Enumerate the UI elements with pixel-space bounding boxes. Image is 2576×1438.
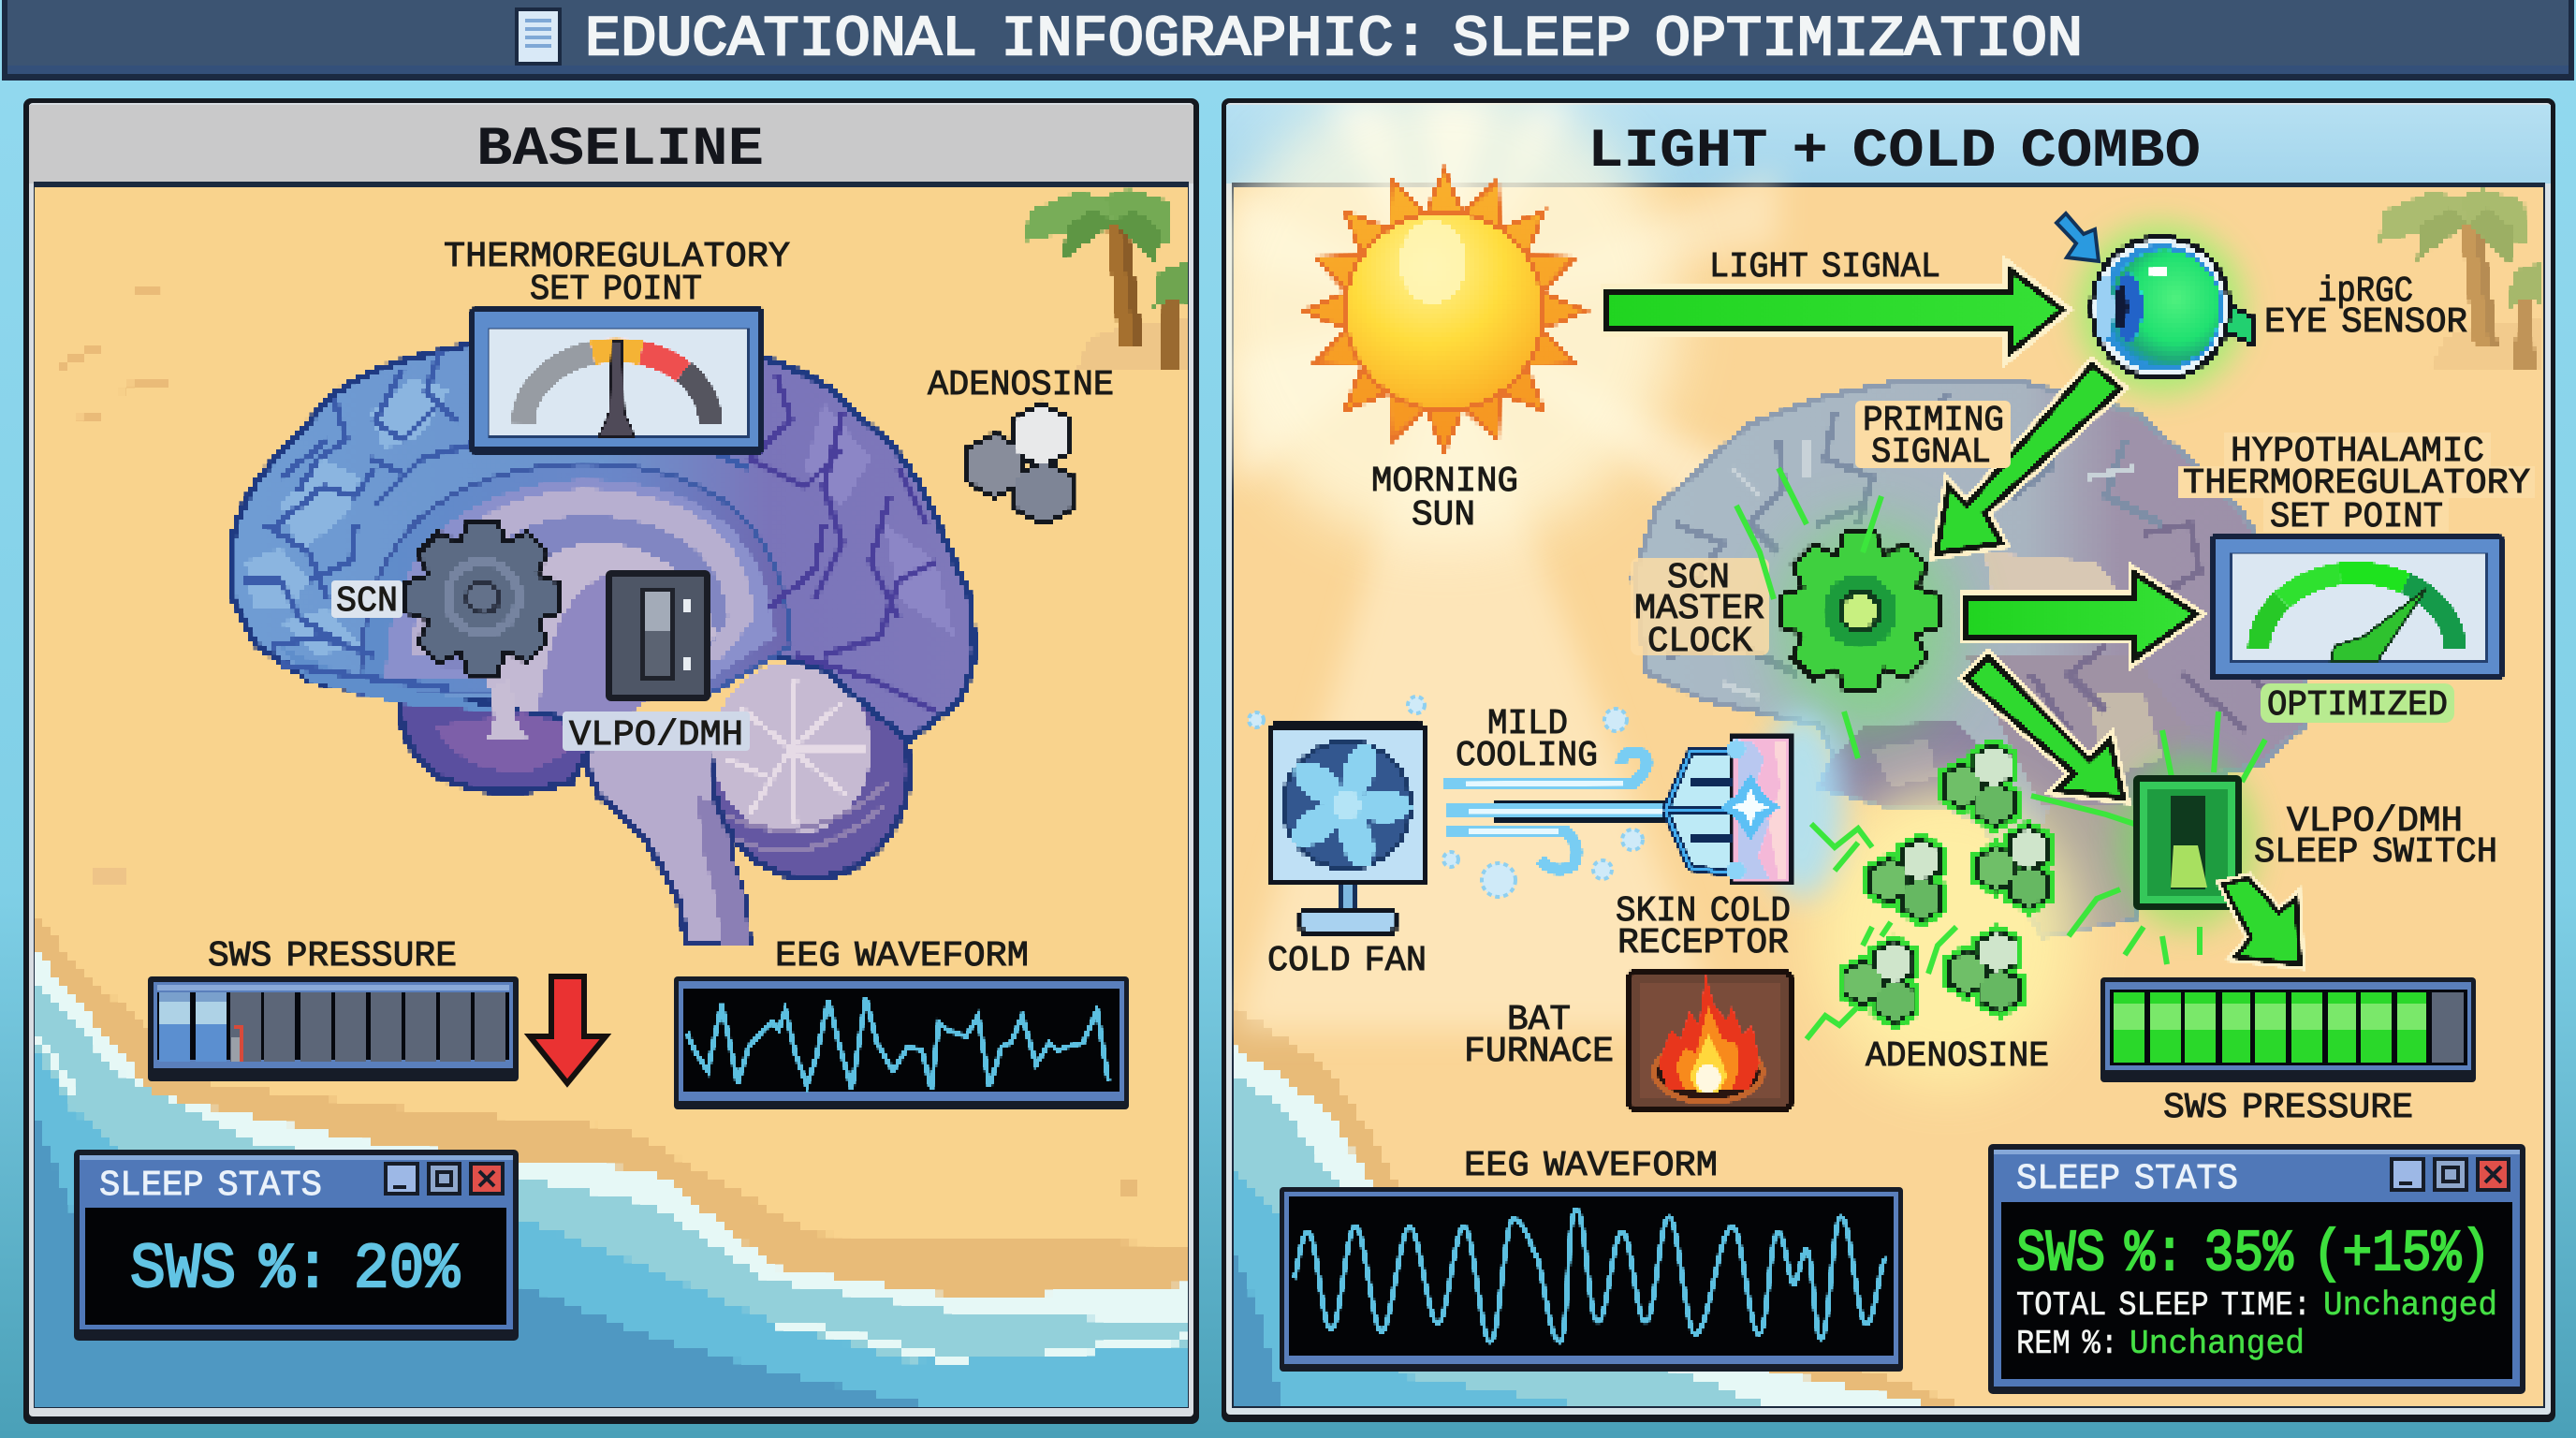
icon: cold fan [1269, 726, 1425, 932]
brain illustration [233, 330, 974, 944]
mild cooling label: COOLING [1456, 736, 1598, 776]
icon: document [517, 9, 560, 64]
arrow: to set point [1967, 574, 2196, 658]
priming signal label: PRIMING [1863, 401, 2004, 441]
optimized gauge [2209, 535, 2504, 681]
thermoregulatory label [444, 237, 790, 310]
window buttons [2392, 1159, 2509, 1190]
panel frame [1222, 98, 2555, 1422]
thermoregulatory gauge [470, 307, 765, 454]
mild cooling label [1456, 704, 1598, 776]
central patches [1984, 552, 2125, 599]
window title: SLEEP STATS [99, 1166, 322, 1206]
morning sun label: SUN [1412, 495, 1475, 536]
VLPO/DMH label: VLPO/DMH [569, 715, 743, 756]
SWS pressure bar [148, 976, 519, 1081]
icon: adenosine molecule [969, 405, 1070, 522]
thermoregulatory label: SET POINT [530, 270, 702, 310]
SCN master clock label: CLOCK [1647, 622, 1752, 662]
morning sun label [1371, 462, 1518, 536]
heading: light + cold combo: LIGHT + COLD COMBO [1588, 122, 2201, 183]
EEG trace [1295, 1210, 1886, 1342]
icon: ipRGC eye [2089, 235, 2253, 381]
cerebrum [233, 330, 974, 741]
brainstem [580, 740, 749, 944]
arrow: SWS pressure down [530, 976, 606, 1083]
window title: SLEEP STATS [2016, 1159, 2238, 1199]
SCN master clock label [1631, 558, 1769, 662]
SWS pressure bar [2100, 977, 2476, 1082]
thermoregulatory label: THERMOREGULATORY [444, 237, 790, 277]
panel frame [23, 98, 1199, 1424]
EEG trace [687, 998, 1108, 1089]
beach background [1234, 187, 2543, 1406]
bat furnace label: BAT [1507, 1000, 1571, 1040]
sulci [242, 351, 749, 688]
optimized label: OPTIMIZED [2267, 685, 2448, 726]
stat: total sleep time: Unchanged [2323, 1286, 2497, 1325]
VLPO/DMH sleep switch label: VLPO/DMH [2287, 801, 2463, 842]
stat: REM: REM %: [2016, 1325, 2118, 1363]
palm trees [2378, 189, 2542, 370]
mild cooling label: MILD [1487, 704, 1568, 744]
adenosine clusters [1736, 468, 2265, 1039]
bat furnace label: FURNACE [1464, 1032, 1614, 1072]
hypothalamic label: SET POINT [2270, 497, 2443, 537]
skin cold receptor label [1616, 891, 1791, 963]
inner rings [360, 463, 791, 693]
arrow: to SWS pressure [2223, 878, 2300, 964]
ipRGC label: EYE SENSOR [2264, 302, 2467, 343]
morning sun label: MORNING [1371, 462, 1518, 502]
icon: skin cold receptor [1665, 737, 1791, 883]
window buttons [386, 1164, 503, 1194]
EEG monitor [674, 976, 1129, 1109]
arrow: to sleep switch [1967, 657, 2123, 798]
stat: SWS 35%: SWS %: 35% (+15%) [2016, 1221, 2491, 1287]
stat: total sleep time [2016, 1286, 2497, 1325]
gyrus highlights [245, 379, 449, 655]
arrow: priming signal [1937, 365, 2120, 553]
bat furnace label [1464, 1000, 1614, 1072]
SWS pressure label: SWS PRESSURE [208, 936, 457, 976]
skin cold receptor label: SKIN COLD [1616, 891, 1791, 932]
light signal label: LIGHT SIGNAL [1709, 247, 1940, 287]
sun rays [1210, 77, 1778, 1030]
beach background [35, 187, 1188, 1407]
skin cold receptor label: RECEPTOR [1617, 923, 1789, 963]
panel: light + cold combo [1210, 77, 2555, 1422]
ipRGC label: ipRGC [2318, 271, 2413, 312]
arrow: blue light ray [2056, 213, 2099, 261]
stat: REM: Unchanged [2130, 1325, 2305, 1363]
EEG waveform label: EEG WAVEFORM [775, 936, 1029, 976]
brain illustration (faded) [1633, 382, 2307, 936]
cold fan label: COLD FAN [1267, 941, 1427, 981]
SWS pressure label: SWS PRESSURE [2163, 1088, 2413, 1128]
EEG waveform label: EEG WAVEFORM [1464, 1146, 1718, 1186]
SCN label: SCN [336, 581, 398, 622]
panel: baseline [23, 98, 1199, 1424]
temporal lobe [401, 693, 599, 791]
green energy glow [1760, 223, 2258, 1086]
cerebellum [712, 663, 909, 878]
window: sleep stats baseline [74, 1150, 519, 1341]
priming signal label: SIGNAL [1871, 433, 1991, 473]
title text: EDUCATIONAL INFOGRAPHIC: SLEEP OPTIMIZATION [585, 8, 2083, 72]
energy sparks [1736, 468, 2265, 1039]
icon: morning sun [1304, 170, 1585, 451]
icon: SCN gear [408, 522, 558, 672]
EEG monitor [1280, 1187, 1903, 1372]
icon: BAT furnace [1629, 972, 1791, 1109]
title bar [2, 0, 2574, 81]
lower lobe [1820, 721, 1984, 806]
adenosine label: ADENOSINE [1866, 1036, 2049, 1077]
arrow: light signal [1607, 270, 2062, 353]
stat: SWS 20%: SWS %: 20% [130, 1234, 460, 1306]
SCN master clock label: SCN [1667, 558, 1730, 598]
priming signal label [1855, 401, 2011, 473]
stat: total sleep time: TOTAL SLEEP TIME: [2016, 1286, 2311, 1325]
adenosine label: ADENOSINE [928, 365, 1114, 405]
hypothalamic label: THERMOREGULATORY [2183, 463, 2530, 504]
stat: REM [2016, 1325, 2305, 1363]
VLPO/DMH sleep switch label [2254, 801, 2497, 873]
icon: VLPO/DMH green switch [2133, 775, 2242, 910]
sulci [1666, 393, 2162, 674]
VLPO/DMH sleep switch label: SLEEP SWITCH [2254, 832, 2497, 873]
cold air streams [1443, 752, 1676, 870]
window: sleep stats combo [1988, 1144, 2525, 1394]
icon: VLPO/DMH switch [606, 570, 710, 701]
icon: green SCN gear [1782, 534, 1938, 689]
SCN master clock label: MASTER [1634, 589, 1764, 629]
snowflakes [1249, 697, 1643, 897]
ipRGC label [2264, 271, 2467, 343]
heading: baseline: BASELINE [476, 120, 764, 181]
palm trees [1024, 189, 1188, 370]
hypothalamic label [2178, 432, 2535, 537]
hypothalamic label: HYPOTHALAMIC [2231, 432, 2484, 472]
